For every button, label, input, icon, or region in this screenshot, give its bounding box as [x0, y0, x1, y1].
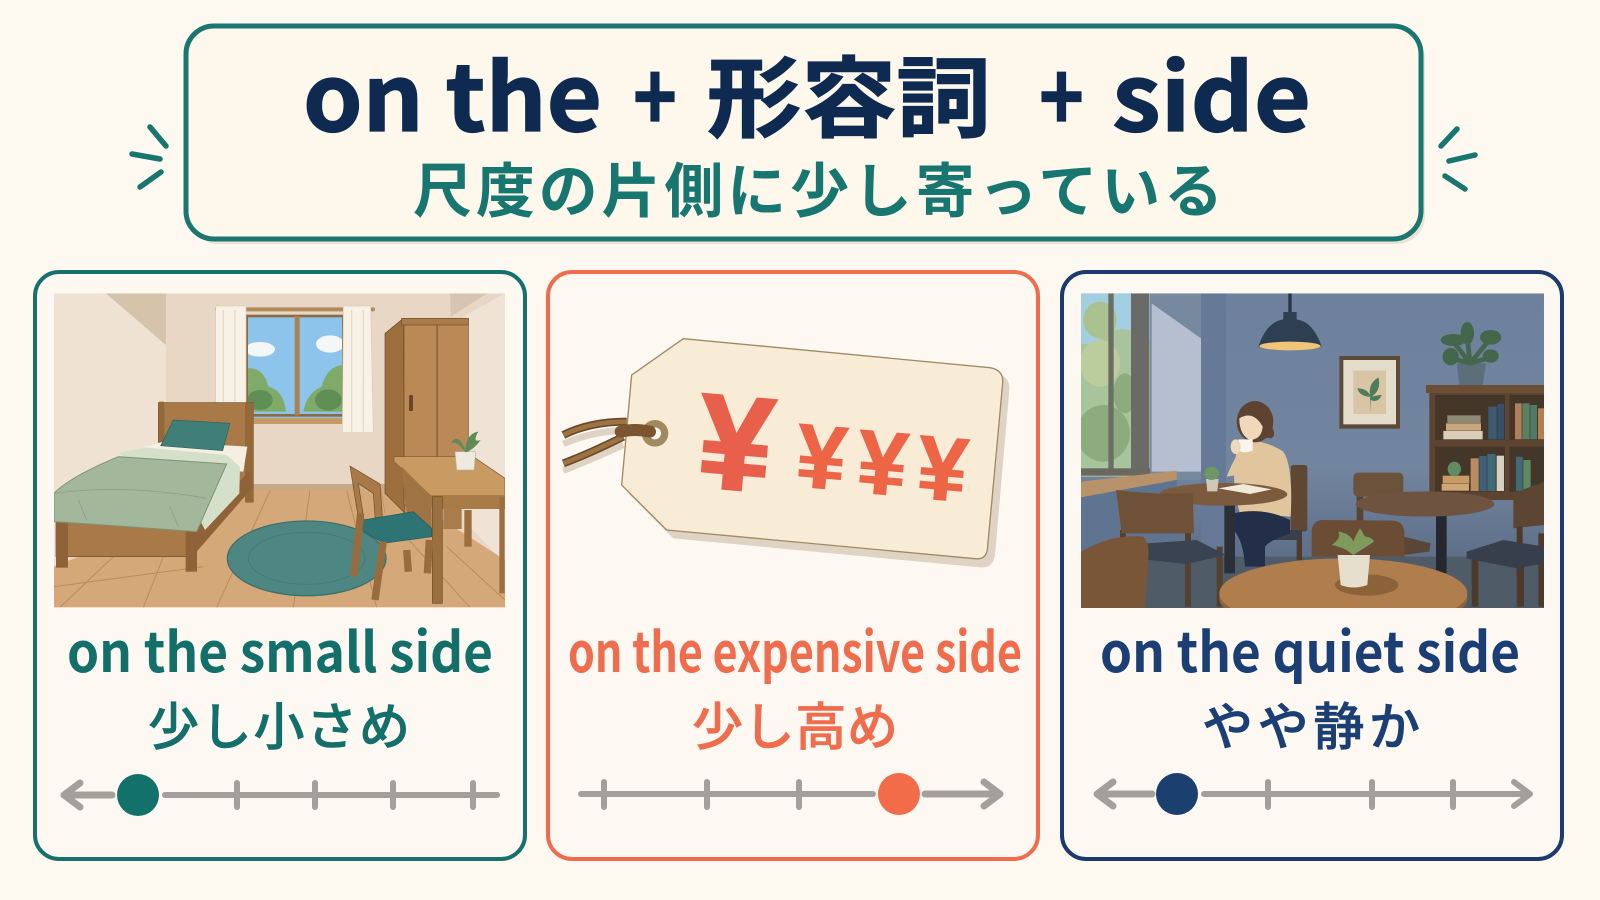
front table	[1219, 596, 1468, 608]
shelf plant	[1457, 363, 1486, 385]
window	[1081, 329, 1150, 477]
right chair	[1472, 557, 1478, 607]
yen symbols: ¥	[913, 417, 973, 522]
title banner	[186, 25, 1425, 244]
panel: on the small side	[35, 272, 525, 859]
scale: expensive	[581, 773, 1000, 815]
illustration: price tag	[563, 339, 1009, 567]
pendant lamp	[1288, 293, 1292, 313]
english phrase: on the expensive side	[568, 608, 1022, 688]
far chair	[1291, 465, 1307, 532]
scale: small	[64, 774, 497, 816]
heading: main formula: 形容詞	[707, 29, 991, 156]
string	[563, 422, 627, 471]
desk	[394, 457, 505, 497]
scale: quiet	[1097, 773, 1530, 815]
panel: on the quiet side	[1062, 272, 1562, 859]
decoration: left sparks	[132, 127, 166, 187]
yen symbols: ¥	[853, 411, 913, 516]
middle chair back	[1312, 520, 1404, 557]
panel: on the expensive side	[548, 272, 1038, 859]
yen symbols: ¥	[792, 405, 852, 510]
illustration: quiet cafe	[1077, 293, 1544, 633]
rug	[227, 521, 386, 596]
subtitle: 尺度の片側に少し寄っている	[413, 144, 1223, 229]
wall picture	[1339, 356, 1400, 429]
heading: main formula: on the	[303, 25, 602, 158]
left chair	[1120, 530, 1126, 538]
front left chair	[1081, 536, 1149, 608]
yen symbols	[692, 366, 973, 522]
eyelet	[642, 420, 668, 447]
bookshelf	[1429, 388, 1544, 500]
heading: main formula	[303, 25, 1311, 158]
potted plant	[455, 452, 476, 470]
back chairs	[1353, 473, 1403, 497]
japanese meaning: 少し小さめ	[148, 686, 410, 760]
person	[1234, 441, 1291, 517]
wardrobe	[385, 318, 405, 513]
right table	[1436, 515, 1447, 573]
heading: main formula: +	[1039, 25, 1084, 158]
window	[246, 315, 344, 419]
decoration: right sparks	[1441, 129, 1475, 189]
heading: main formula: side	[1112, 25, 1311, 158]
yen symbols: ¥	[692, 366, 779, 521]
english phrase: on the quiet side	[1100, 608, 1520, 688]
table with book	[1224, 503, 1235, 573]
illustration: small bedroom	[54, 293, 505, 607]
chair	[380, 487, 386, 514]
bed	[158, 403, 253, 489]
japanese meaning: 少し高め	[692, 686, 898, 760]
english phrase: on the small side	[67, 608, 493, 688]
heading: main formula: +	[633, 25, 677, 158]
japanese meaning: やや静か	[1202, 686, 1420, 760]
